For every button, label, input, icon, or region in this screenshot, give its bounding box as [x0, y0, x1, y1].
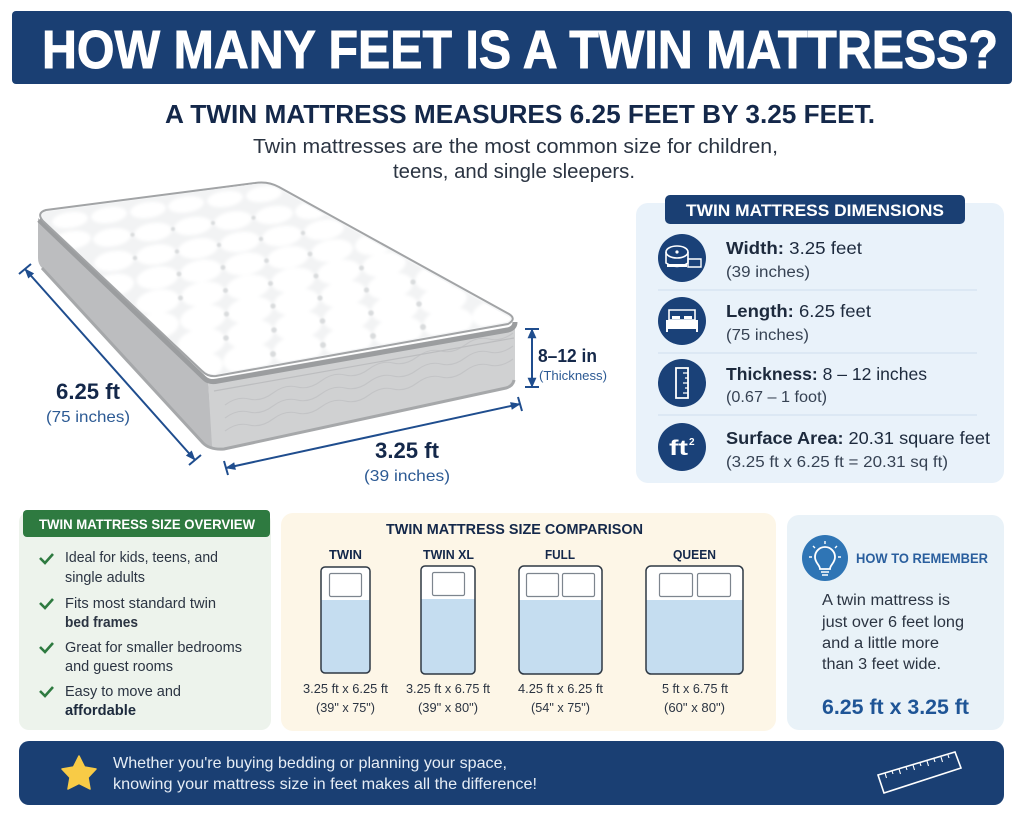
item: fits frames [40, 596, 216, 631]
icon: square feet: ft [669, 437, 688, 460]
front side of mattress [208, 326, 515, 450]
bed: full: (54" x 75") [531, 700, 590, 715]
icon: square feet [658, 423, 706, 471]
row: width: Width: 3.25 feet [726, 238, 862, 258]
remember text: than 3 feet wide. [822, 656, 941, 673]
side stitching [225, 333, 513, 431]
bed: queen: (60" x 80") [664, 700, 725, 715]
label: length [46, 379, 130, 426]
bed: queen: 5 ft x 6.75 ft [662, 681, 728, 696]
row: length: Length: 6.25 feet [726, 301, 871, 321]
bed: queen: QUEEN [673, 548, 716, 562]
row: length: (75 inches) [726, 327, 809, 344]
dimensions heading [665, 195, 965, 224]
label: thickness: 8–12 in [538, 346, 597, 366]
remember heading: HOW TO REMEMBER [856, 551, 988, 566]
item: ideal for: Ideal for kids, teens, and [65, 550, 218, 566]
bed: twin: 3.25 ft x 6.25 ft [303, 681, 388, 696]
bed: queen [646, 548, 743, 715]
arrow: width 3.25 ft [224, 397, 522, 475]
icon: light bulb [802, 535, 848, 581]
remember text: A twin mattress is [822, 592, 950, 609]
row: surface area: Surface Area: 20.31 square feet [726, 428, 990, 448]
icon: star [62, 756, 96, 789]
label: length: 6.25 ft [56, 379, 121, 404]
subtitle block [165, 99, 875, 183]
bed: twin [303, 548, 388, 715]
row: surface area: (3.25 ft x 6.25 ft = 20.31 sq ft) [726, 454, 948, 471]
header banner [12, 11, 1012, 84]
left side of mattress [38, 218, 213, 449]
panel: size overview [19, 510, 271, 730]
icon: bed [658, 297, 706, 345]
label: length: (75 inches) [46, 409, 130, 426]
icon: tape measure [658, 234, 706, 282]
bed: full: FULL [545, 548, 575, 562]
row: thickness [726, 364, 927, 406]
panel: twin mattress dimensions [636, 195, 1004, 483]
bed: full: 4.25 ft x 6.25 ft [518, 681, 603, 696]
dimensions heading: TWIN MATTRESS DIMENSIONS [686, 201, 944, 220]
row: length [726, 301, 871, 344]
arrow: thickness [525, 329, 539, 387]
row: width: (39 inches) [726, 264, 810, 281]
icon: ruler [878, 752, 961, 793]
bed: twin xl [406, 548, 490, 715]
intro line 2: teens, and single sleepers. [393, 160, 635, 183]
row: thickness: Thickness: 8 – 12 inches [726, 364, 927, 384]
bed: twin xl: (39" x 80") [418, 700, 478, 715]
item: easy to move [40, 684, 181, 719]
item: fits frames: Fits most standard twin [65, 596, 216, 612]
overview heading [23, 510, 270, 537]
row: surface area [726, 428, 990, 471]
bed: twin xl: 3.25 ft x 6.75 ft [406, 681, 490, 696]
bed: twin: TWIN [329, 548, 362, 562]
item: easy to move: affordable [65, 703, 136, 719]
band seam [214, 338, 514, 391]
panel: how to remember [787, 515, 1004, 730]
label: thickness [538, 346, 607, 383]
footer banner [19, 741, 1004, 805]
footer text [113, 755, 537, 793]
row: thickness: (0.67 – 1 foot) [726, 389, 827, 406]
quilted tufts [54, 184, 510, 374]
item: smaller bedrooms [40, 640, 242, 675]
item: smaller bedrooms: and guest rooms [65, 659, 173, 675]
item: ideal for: single adults [65, 570, 145, 586]
comparison heading: TWIN MATTRESS SIZE COMPARISON [386, 522, 643, 538]
pillow top piping [39, 220, 515, 382]
icon: ruler [658, 359, 706, 407]
item: ideal for [40, 550, 218, 586]
label: width: 3.25 ft [375, 438, 440, 463]
bed: twin: (39" x 75") [316, 700, 375, 715]
item: fits frames: bed frames [65, 615, 138, 631]
footer text: Whether you're buying bedding or planning your space, [113, 755, 507, 772]
mattress top surface [40, 182, 513, 376]
overview heading: TWIN MATTRESS SIZE OVERVIEW [39, 516, 256, 532]
label: width [364, 438, 450, 485]
arrow: length 6.25 ft [19, 264, 201, 465]
remember text: and a little more [822, 635, 939, 652]
bottom piping [42, 268, 514, 449]
intro line 1: Twin mattresses are the most common size for children, [253, 135, 778, 158]
remember dimensions: 6.25 ft x 3.25 ft [822, 696, 969, 719]
label: width: (39 inches) [364, 468, 450, 485]
footer text: knowing your mattress size in feet makes all the difference! [113, 776, 537, 793]
panel: size comparison [281, 513, 776, 731]
bed: twin xl: TWIN XL [423, 548, 474, 562]
bed: full [518, 548, 603, 715]
row: width [726, 238, 862, 281]
subtitle heading: A TWIN MATTRESS MEASURES 6.25 FEET BY 3.25 FEET. [165, 99, 875, 129]
label: thickness: (Thickness) [539, 368, 607, 383]
item: smaller bedrooms: Great for smaller bedrooms [65, 640, 242, 656]
remember text: just over 6 feet long [821, 614, 964, 631]
icon: square feet: 2 [689, 437, 695, 448]
mattress illustration [30, 175, 520, 450]
remember text [821, 592, 964, 673]
item: easy to move: Easy to move and [65, 684, 181, 700]
